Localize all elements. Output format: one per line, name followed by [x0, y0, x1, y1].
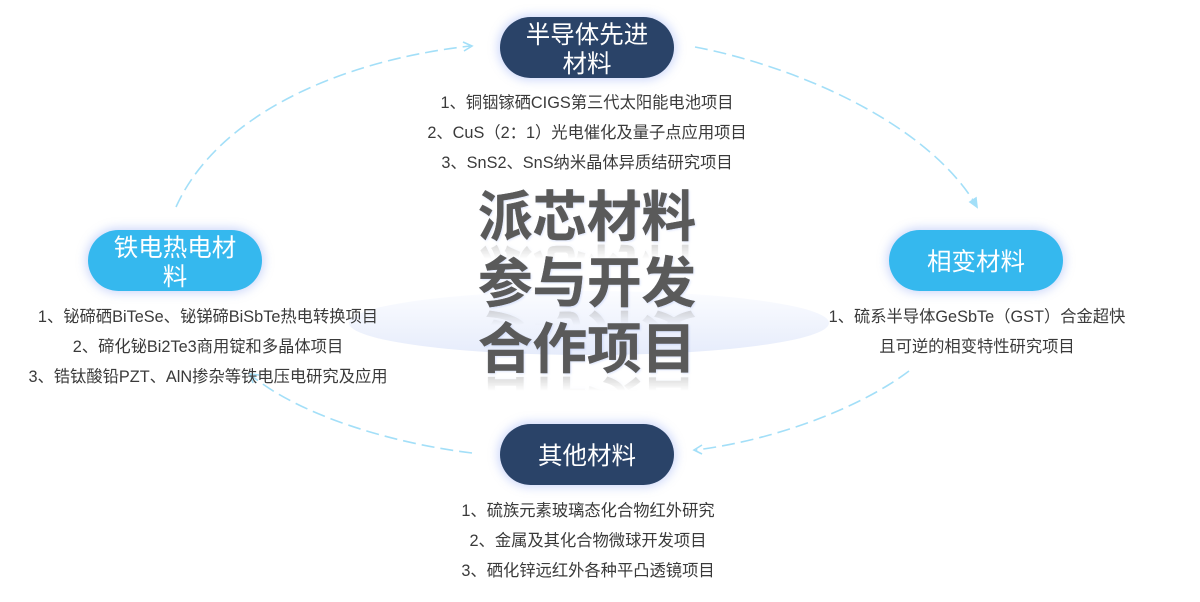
text block: other projects: 1、硫族元素玻璃态化合物红外研究 [461, 502, 715, 520]
text block: phase change projects: 且可逆的相变特性研究项目 [879, 338, 1075, 356]
arrow: right to bottom [694, 371, 909, 454]
text block: ferroelectric projects: 2、碲化铋Bi2Te3商用锭和多晶体项目 [73, 338, 343, 356]
text block: ferroelectric projects [28, 308, 388, 386]
pill: semiconductor materials [500, 17, 674, 78]
text block: semiconductor projects: 3、SnS2、SnS纳米晶体异质结研究项目 [441, 154, 733, 172]
text block: other projects [461, 502, 715, 580]
text block: other projects: 2、金属及其化合物微球开发项目 [470, 532, 706, 550]
text block: phase change projects [829, 308, 1125, 356]
pill: semiconductor materials: 材料 [562, 50, 612, 78]
decorative ellipse behind title [349, 304, 829, 355]
pill: semiconductor materials: 半导体先进 [526, 22, 648, 48]
pill: ferroelectric and thermoelectric materials: 料 [163, 264, 187, 290]
title [478, 187, 696, 388]
text block: other projects: 3、硒化锌远红外各种平凸透镜项目 [461, 562, 715, 580]
text block: semiconductor projects [427, 94, 747, 172]
text block: ferroelectric projects: 3、锆钛酸铅PZT、AlN掺杂等铁电压电研究及应用 [28, 368, 388, 386]
title: 参与开发 [478, 253, 696, 314]
pill: other materials [500, 424, 674, 485]
title: 派芯材料 [478, 187, 696, 248]
text block: semiconductor projects: 1、铜铟镓硒CIGS第三代太阳能电池项目 [440, 94, 734, 112]
pill: ferroelectric and thermoelectric materials: 铁电热电材 [114, 234, 236, 262]
pill: phase change materials [889, 230, 1063, 291]
arrow: bottom to left [250, 374, 472, 453]
pill: other materials: 其他材料 [538, 443, 636, 470]
pill: phase change materials: 相变材料 [927, 249, 1025, 276]
arrow: left to top [176, 42, 472, 207]
arrow: top to right [695, 47, 977, 207]
title: 合作项目 [478, 319, 696, 380]
text block: ferroelectric projects: 1、铋碲硒BiTeSe、铋锑碲BiSbTe热电转换项目 [38, 308, 378, 326]
pill: ferroelectric and thermoelectric materials [88, 230, 262, 291]
text block: phase change projects: 1、硫系半导体GeSbTe（GST）合金超快 [829, 308, 1125, 326]
text block: semiconductor projects: 2、CuS（2：1）光电催化及量子点应用项目 [427, 124, 747, 142]
